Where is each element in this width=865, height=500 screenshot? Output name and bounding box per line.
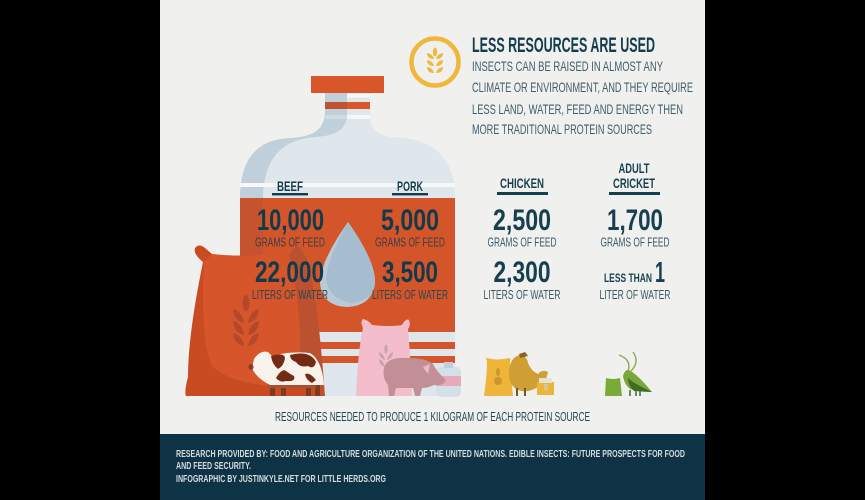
icon: water jug by pig — [436, 362, 461, 397]
column: pork: 5,000 — [381, 204, 439, 237]
column: chicken: 2,300 — [494, 256, 550, 289]
column: pork: LITERS OF WATER — [372, 287, 448, 302]
water drop — [320, 222, 375, 307]
icon: pig — [384, 358, 446, 396]
footer — [160, 434, 705, 500]
column: adult cricket: GRAMS OF FEED — [600, 234, 670, 250]
column: adult cricket: LITER OF WATER — [600, 287, 670, 302]
intro text: INSECTS CAN BE RAISED IN ALMOST ANY — [472, 58, 663, 74]
intro text — [472, 58, 693, 137]
column: adult cricket: ADULT — [618, 160, 650, 176]
footer: INFOGRAPHIC BY JUSTINKYLE.NET FOR LITTLE HERDS.ORG — [176, 474, 386, 485]
icon: pink feed sack — [356, 319, 412, 396]
column: beef — [252, 178, 328, 302]
icon: cricket — [619, 352, 652, 396]
column: adult cricket: LESS THAN — [604, 271, 652, 285]
column: beef: BEEF — [277, 178, 303, 194]
column: adult cricket: 1 — [655, 257, 665, 289]
column: pork: 3,500 — [382, 256, 438, 289]
column: chicken: GRAMS OF FEED — [488, 234, 556, 250]
icon: wheat badge — [412, 38, 458, 86]
column: beef: GRAMS OF FEED — [255, 234, 325, 250]
heading: LESS RESOURCES ARE USED — [472, 34, 655, 57]
column: pork: PORK — [397, 178, 423, 194]
column: chicken: CHICKEN — [500, 175, 544, 191]
icon: chicken — [509, 352, 548, 396]
column: adult cricket: CRICKET — [613, 175, 655, 191]
icon: cow — [248, 352, 324, 396]
intro text: LESS LAND, WATER, FEED AND ENERGY THEN — [472, 101, 683, 117]
column: pork — [372, 178, 448, 302]
water bottle — [240, 76, 455, 396]
column: beef: 22,000 — [255, 256, 324, 289]
column: chicken — [484, 175, 560, 302]
intro text: CLIMATE OR ENVIRONMENT, AND THEY REQUIRE — [472, 79, 693, 95]
intro text: MORE TRADITIONAL PROTEIN SOURCES — [472, 121, 652, 137]
icon: yellow feed sack — [484, 358, 513, 396]
column: beef: LITERS OF WATER — [252, 287, 328, 302]
column: beef: 10,000 — [257, 204, 324, 237]
icon: feed bucket — [537, 378, 554, 395]
column: adult cricket: 1,700 — [607, 204, 663, 237]
column: pork: GRAMS OF FEED — [375, 234, 445, 250]
column: chicken: LITERS OF WATER — [484, 287, 560, 302]
column: chicken: 2,500 — [493, 204, 551, 237]
footer: AND FEED SECURITY. — [176, 461, 251, 472]
caption: RESOURCES NEEDED TO PRODUCE 1 KILOGRAM OF EACH PROTEIN SOURCE — [275, 409, 590, 424]
icon: green feed sack — [605, 378, 622, 396]
icon: red feed sack — [185, 246, 325, 396]
column: adult cricket — [600, 160, 670, 302]
